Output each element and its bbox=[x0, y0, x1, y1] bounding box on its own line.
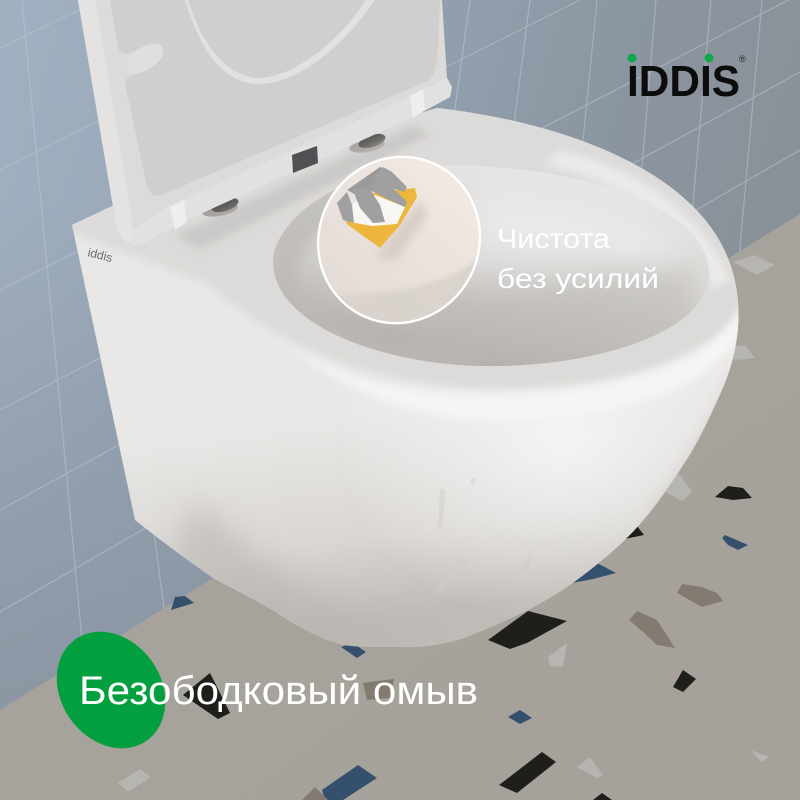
top surface of rim bbox=[60, 100, 745, 390]
bowl interior bbox=[273, 165, 709, 366]
shadow under lid bbox=[175, 125, 430, 250]
soap foam bbox=[350, 195, 405, 226]
spot inner rim shading bbox=[340, 260, 476, 322]
glove palm bbox=[347, 167, 392, 197]
bowl shading bbox=[273, 189, 700, 366]
floor: terrazzo bbox=[0, 214, 800, 800]
small brand mark on ceramic: iddis bbox=[86, 245, 114, 265]
glove fingers bbox=[337, 167, 407, 223]
hinge strip bbox=[130, 78, 452, 246]
terrazzo chips: light bbox=[118, 255, 775, 792]
front rim highlight bbox=[324, 314, 738, 412]
lid bumper bbox=[126, 45, 162, 73]
right rim highlight bbox=[545, 150, 730, 290]
iddis logo: IDDIS bbox=[627, 57, 740, 106]
title: Безободковый омыв bbox=[79, 669, 478, 713]
callout: effortless cleanliness bbox=[497, 223, 659, 294]
lid oval opening bbox=[185, 0, 375, 84]
callout: effortless cleanliness: без усилий bbox=[497, 263, 659, 294]
cleaning spot: circled detail bbox=[316, 156, 481, 324]
sponge bbox=[342, 188, 417, 248]
body shading and reflections bbox=[72, 108, 738, 646]
lid inner panel bbox=[110, 0, 440, 196]
logo green dots bbox=[628, 54, 714, 62]
callout: effortless cleanliness: Чистота bbox=[497, 223, 610, 254]
toilet body bbox=[72, 108, 738, 647]
hinge joints bbox=[170, 200, 187, 230]
terrazzo chips: blue bbox=[171, 535, 748, 800]
chrome seat fixtures bbox=[201, 131, 387, 219]
sponge shadow bbox=[375, 200, 428, 262]
wall-hung toilet bbox=[60, 0, 770, 670]
terrazzo chips: dark bbox=[183, 424, 752, 800]
dark sensor button bbox=[292, 146, 318, 173]
registered mark: ® bbox=[739, 54, 746, 64]
raised seat lid bbox=[78, 0, 452, 246]
terrazzo chips: taupe bbox=[302, 584, 723, 800]
green blob bbox=[34, 611, 188, 769]
lid outer edge highlight bbox=[78, 0, 135, 244]
